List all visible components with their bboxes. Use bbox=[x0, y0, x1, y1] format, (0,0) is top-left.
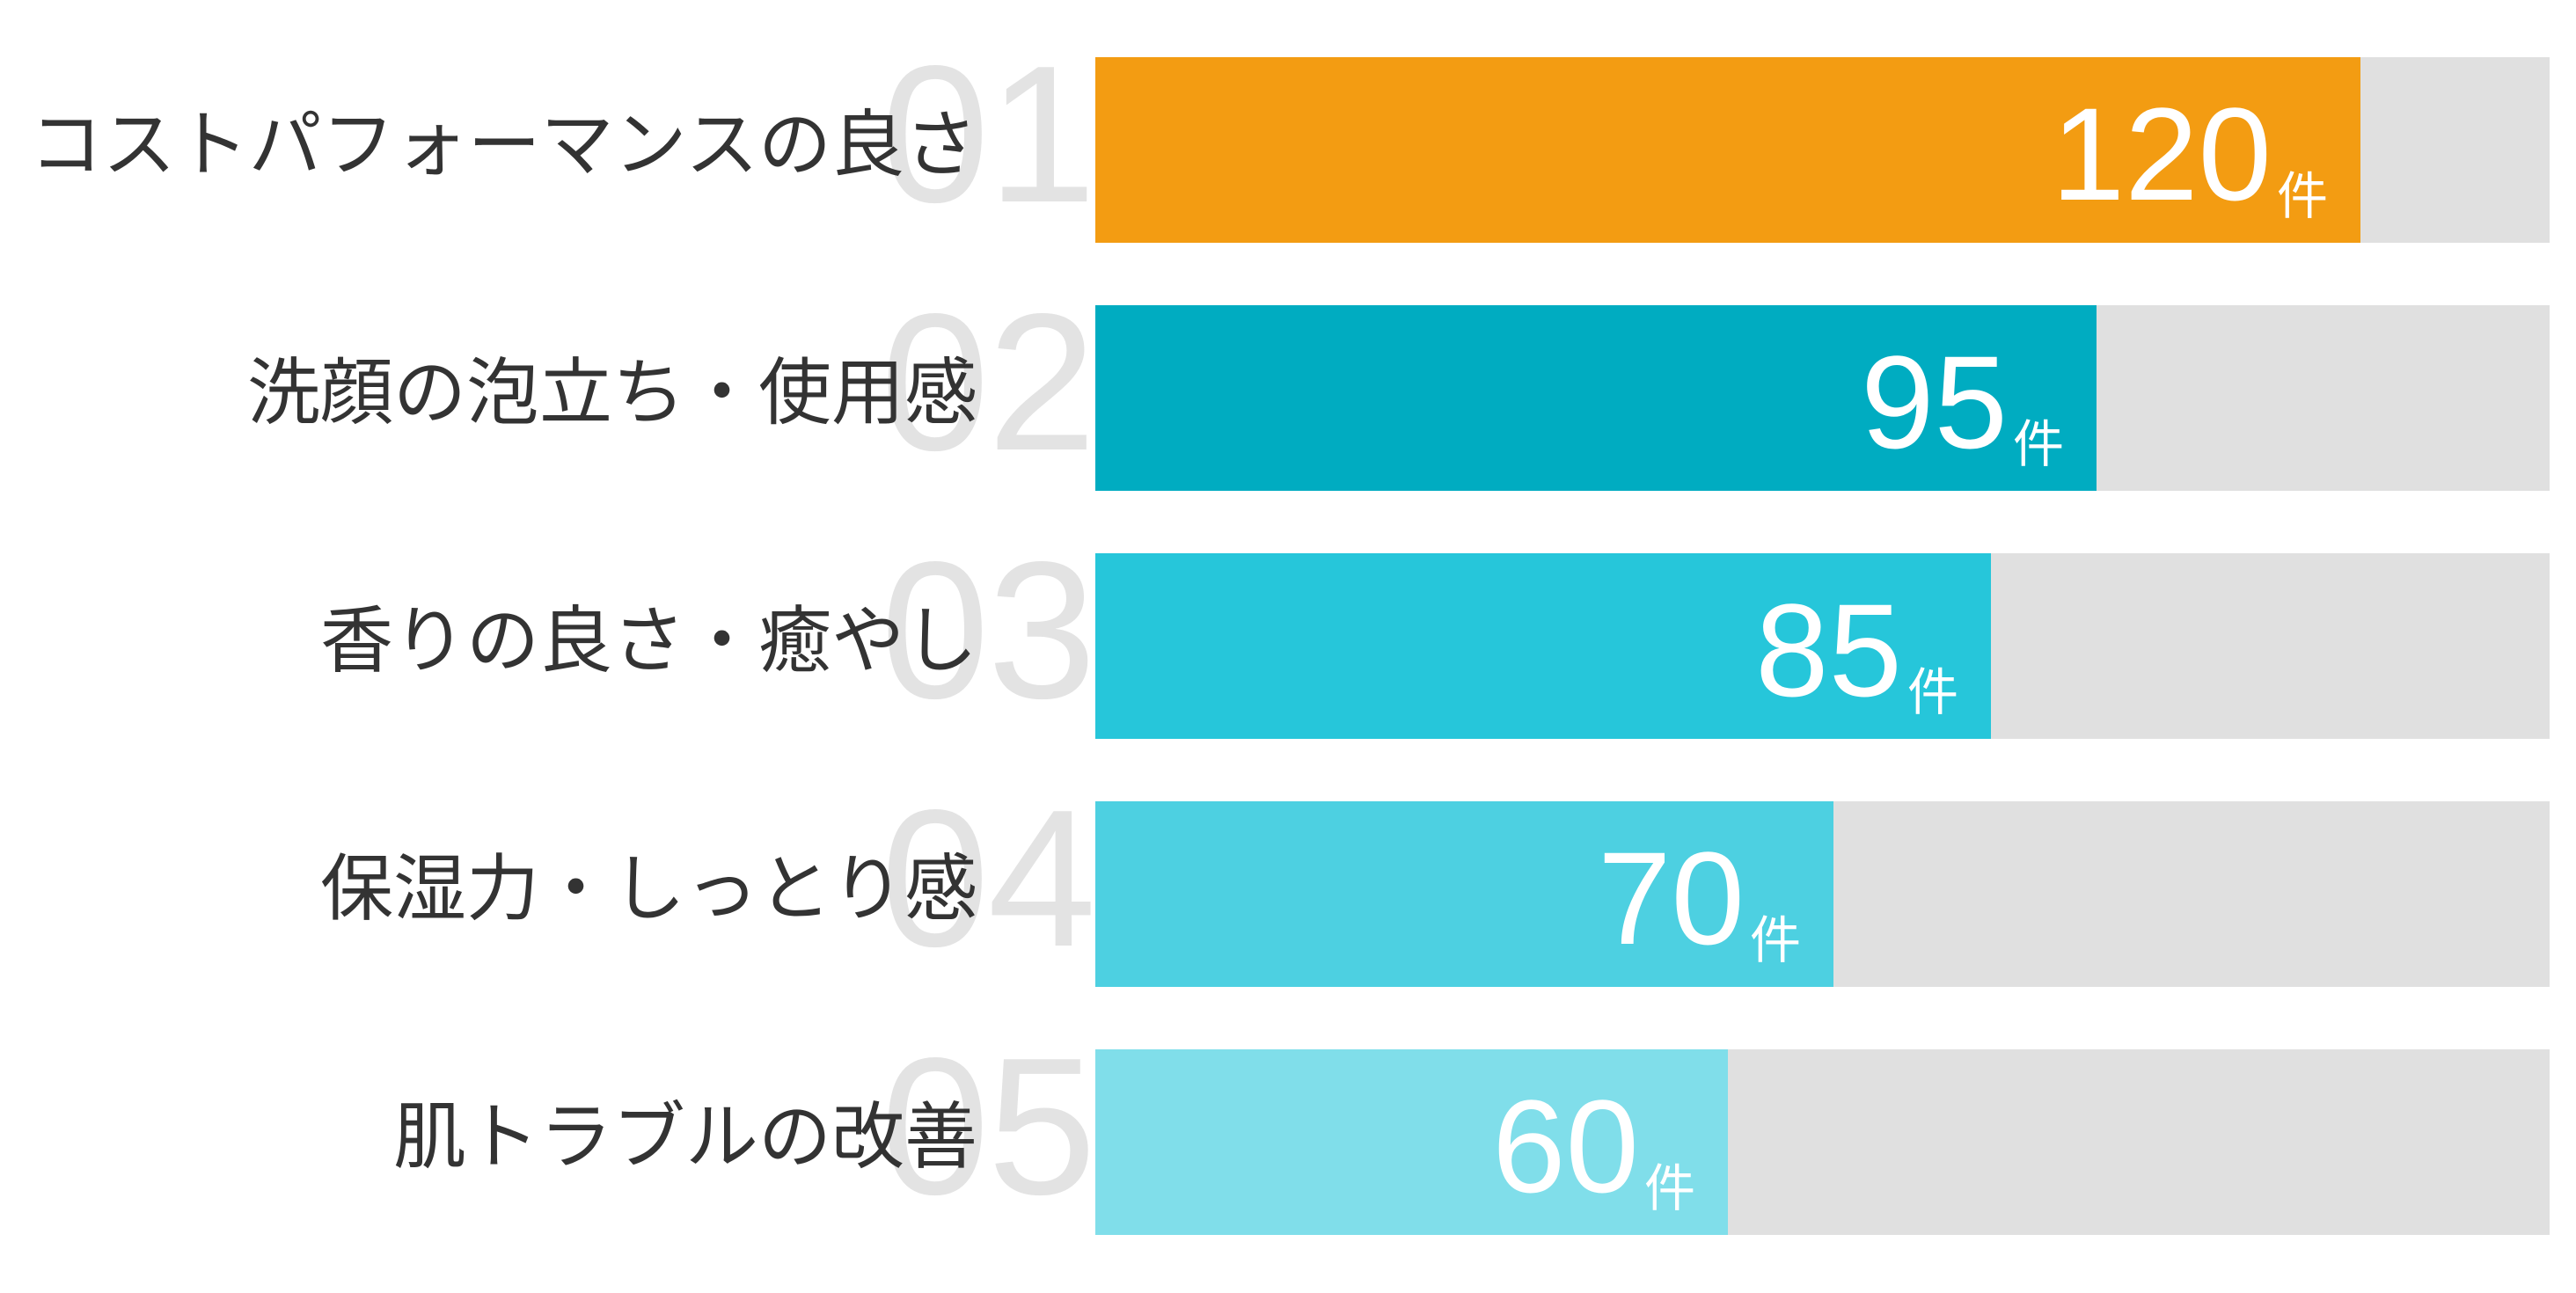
row 2 bbox=[247, 274, 2550, 492]
label 3: 香りの良さ・癒やし bbox=[320, 600, 977, 682]
rank number 01: 01 bbox=[881, 26, 1094, 244]
rank number 02: 02 bbox=[881, 274, 1094, 492]
bar track 3 bbox=[1095, 553, 2550, 739]
value 2: 95件 bbox=[1861, 328, 2064, 476]
bar track 1 bbox=[1095, 57, 2550, 243]
bar fill 4 bbox=[1095, 801, 1833, 987]
rank number 05: 05 bbox=[881, 1018, 1094, 1236]
bar track 5 bbox=[1095, 1049, 2550, 1235]
label 1: コストパフォーマンスの良さ bbox=[30, 104, 977, 186]
rank number 03: 03 bbox=[881, 522, 1094, 740]
row 4 bbox=[320, 770, 2550, 988]
label 2: 洗顔の泡立ち・使用感 bbox=[247, 352, 977, 434]
bar track 2 bbox=[1095, 305, 2550, 491]
row 3 bbox=[320, 522, 2550, 740]
label 5: 肌トラブルの改善 bbox=[393, 1096, 977, 1178]
value 3: 85件 bbox=[1755, 576, 1958, 724]
bar track 4 bbox=[1095, 801, 2550, 987]
bar fill 2 bbox=[1095, 305, 2097, 491]
row 5 bbox=[393, 1018, 2550, 1236]
value 5: 60件 bbox=[1492, 1072, 1695, 1220]
bar fill 1 bbox=[1095, 57, 2360, 243]
value 1: 120件 bbox=[2052, 80, 2328, 228]
label 4: 保湿力・しっとり感 bbox=[320, 848, 977, 930]
row 1 bbox=[30, 26, 2550, 244]
value 4: 70件 bbox=[1598, 824, 1801, 972]
bar fill 5 bbox=[1095, 1049, 1728, 1235]
bar fill 3 bbox=[1095, 553, 1991, 739]
rank number 04: 04 bbox=[881, 770, 1094, 988]
